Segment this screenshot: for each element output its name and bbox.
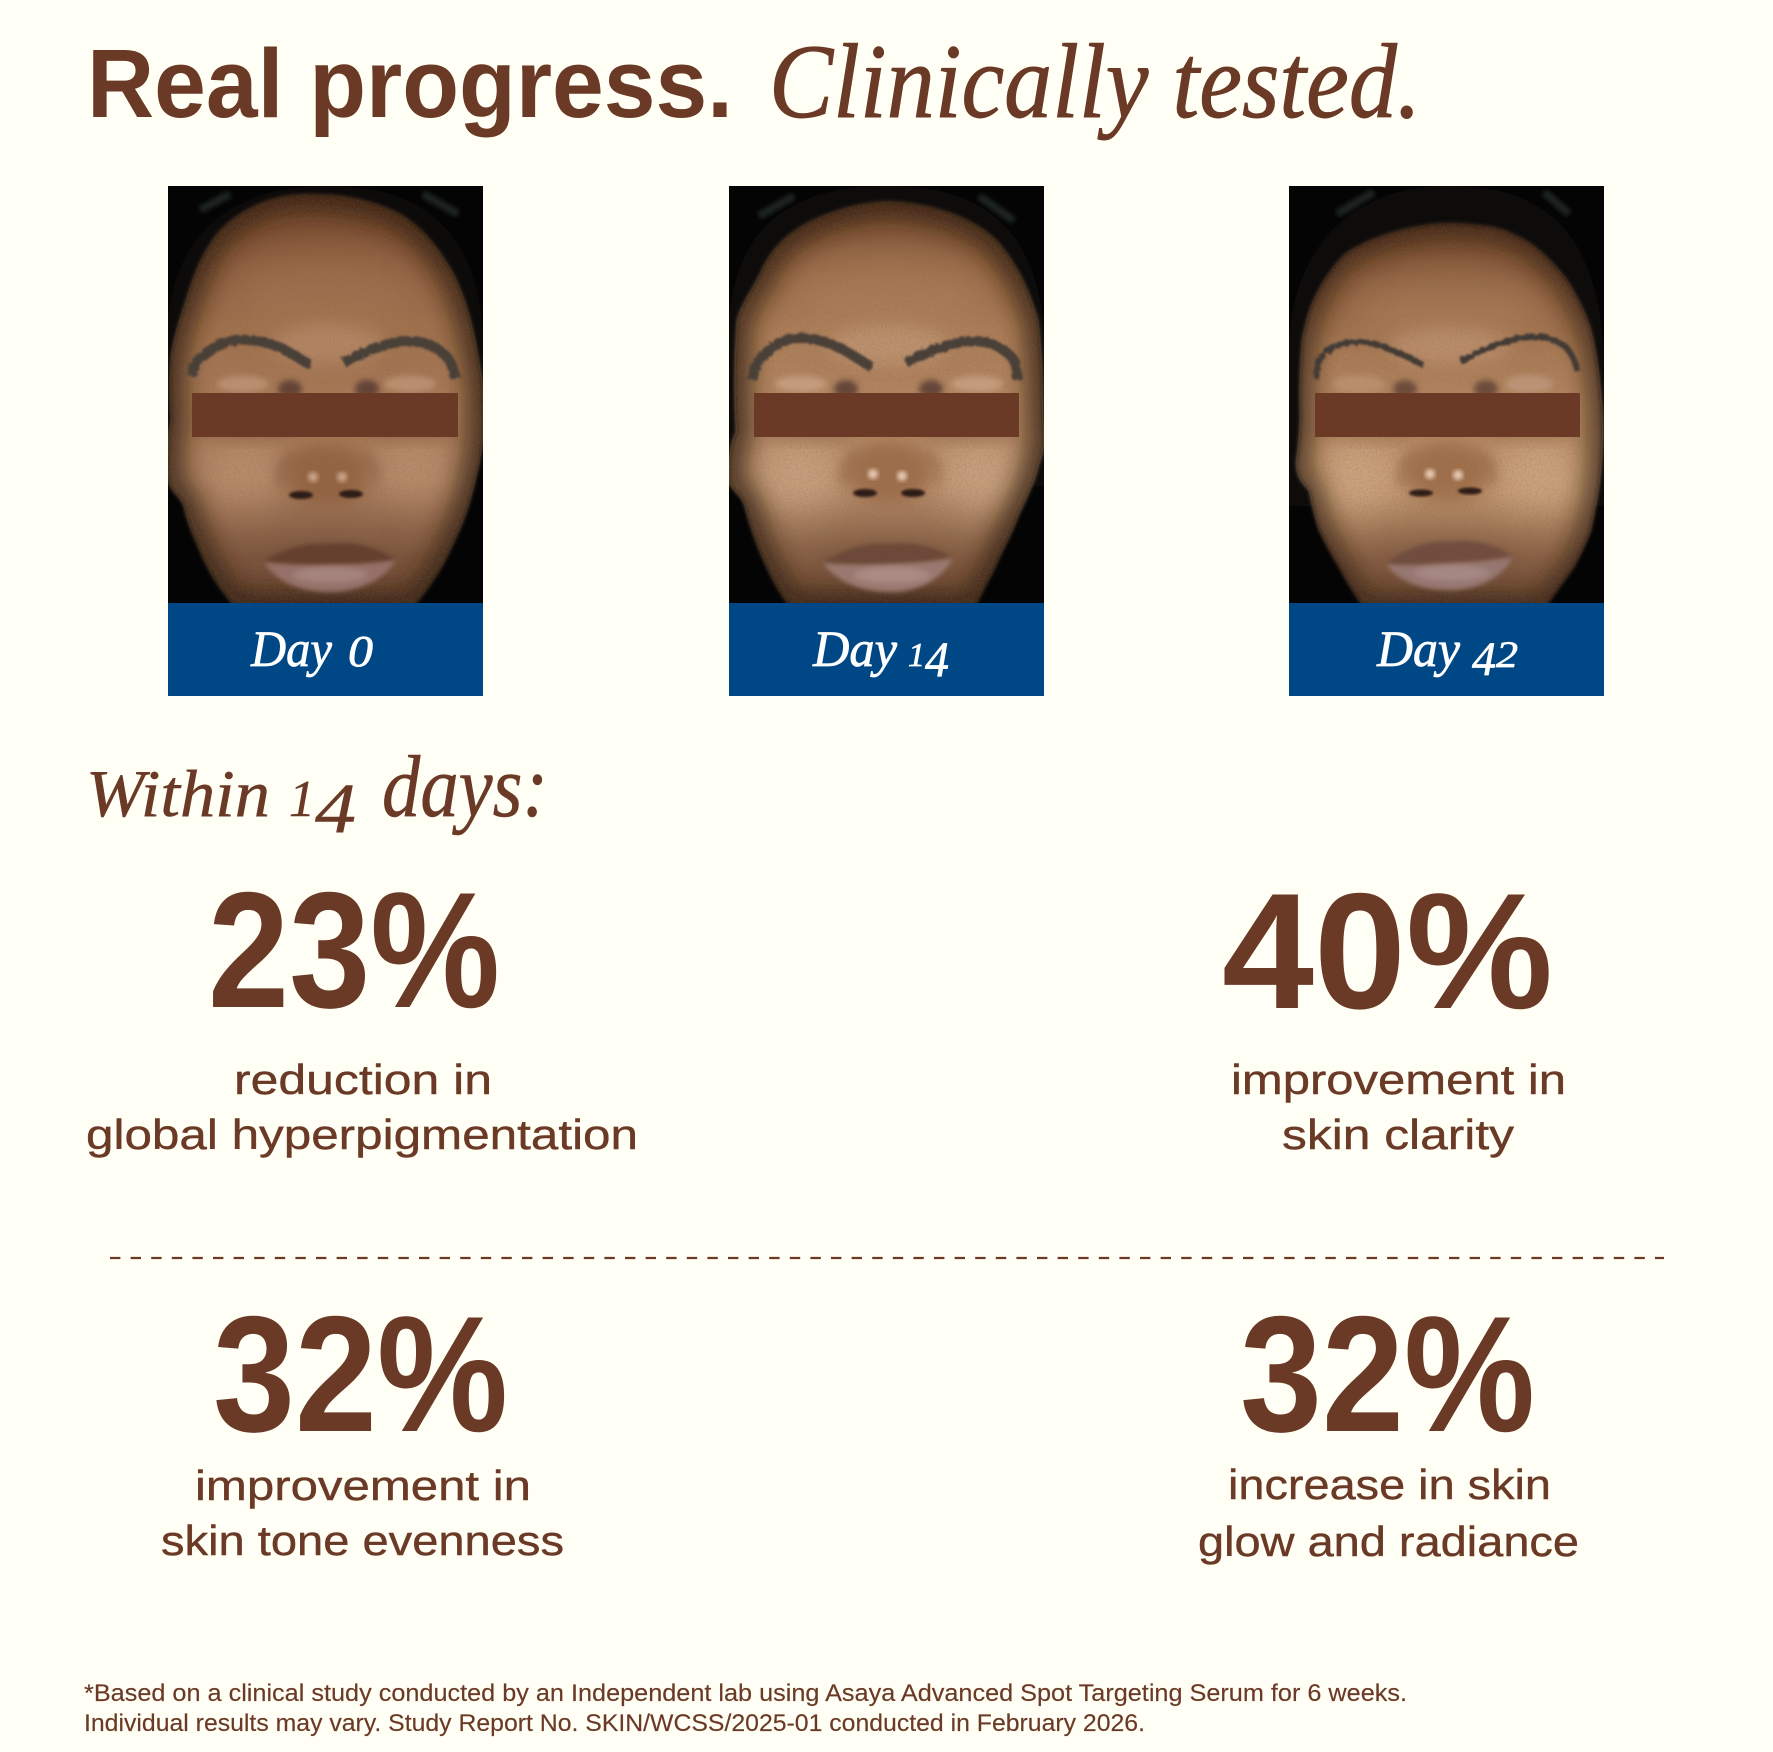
stat: 32% glow and radiance: 32% (1240, 1282, 1535, 1466)
stat: 23% reduction: reduction in (234, 1056, 492, 1103)
photo: Day 42 face (1289, 186, 1604, 606)
eye privacy bar (1315, 393, 1580, 437)
stat: 40% improvement (1222, 859, 1566, 1158)
heading: Within 14 days: days: (382, 739, 548, 836)
stat: 40% improvement: improvement in (1231, 1056, 1566, 1103)
stat: 32% glow and radiance: glow and radiance (1198, 1518, 1579, 1565)
panel: Day 14 photo (729, 186, 1044, 696)
panel: Day 0 photo (168, 186, 483, 696)
label: Day 14: Day (812, 622, 897, 678)
photo: Day 14 face (729, 186, 1044, 606)
eye privacy bar (754, 393, 1019, 437)
stat: 32% skin tone evenness: skin tone evenness (161, 1517, 564, 1564)
heading: Within 14 days: 1 (289, 771, 315, 828)
photo: Day 0 face (168, 186, 483, 606)
footnote: Individual results may vary. Study Report No. SKIN/WCSS/2025-01 conducted in February 2026. (84, 1710, 1145, 1737)
label: Day 14: 1 (908, 637, 925, 674)
label band (729, 603, 1044, 696)
stat: 32% skin tone evenness: 32% (213, 1282, 508, 1466)
stat: 32% skin tone evenness: improvement in (195, 1462, 531, 1509)
stat: 32% glow and radiance: increase in skin (1228, 1461, 1551, 1508)
eye privacy bar (192, 393, 458, 437)
label: Day 42: 4 (1472, 633, 1496, 686)
footnote (84, 1680, 1407, 1737)
label: Day 42: 2 (1496, 635, 1518, 676)
stat: 23% reduction (86, 858, 638, 1158)
stat: 23% reduction: 23% (208, 858, 500, 1042)
stat: 32% glow and radiance (1198, 1282, 1579, 1565)
footnote: *Based on a clinical study conducted by an Independent lab using Asaya Advanced Spot Targeting Serum for 6 weeks. (84, 1680, 1407, 1707)
label: Day 42: Day (1376, 622, 1460, 678)
stat: 40% improvement: skin clarity (1282, 1111, 1514, 1158)
label band (1289, 603, 1604, 696)
stat: 32% skin tone evenness (161, 1282, 564, 1564)
label: Day 14: 4 (925, 631, 949, 687)
stat: 40% improvement: 40% (1222, 859, 1553, 1043)
panel: Day 42 photo (1289, 186, 1604, 696)
stat: 23% reduction: global hyperpigmentation (86, 1111, 638, 1158)
heading: Within 14 days: Within (86, 757, 270, 831)
label: Day 0: Day (250, 622, 332, 678)
title (87, 23, 1421, 140)
title: Real progress. (87, 29, 733, 138)
title: Clinically tested. (769, 23, 1421, 140)
label: Day 0: 0 (348, 627, 373, 676)
label band (168, 603, 483, 696)
heading: Within 14 days: 4 (315, 770, 356, 848)
